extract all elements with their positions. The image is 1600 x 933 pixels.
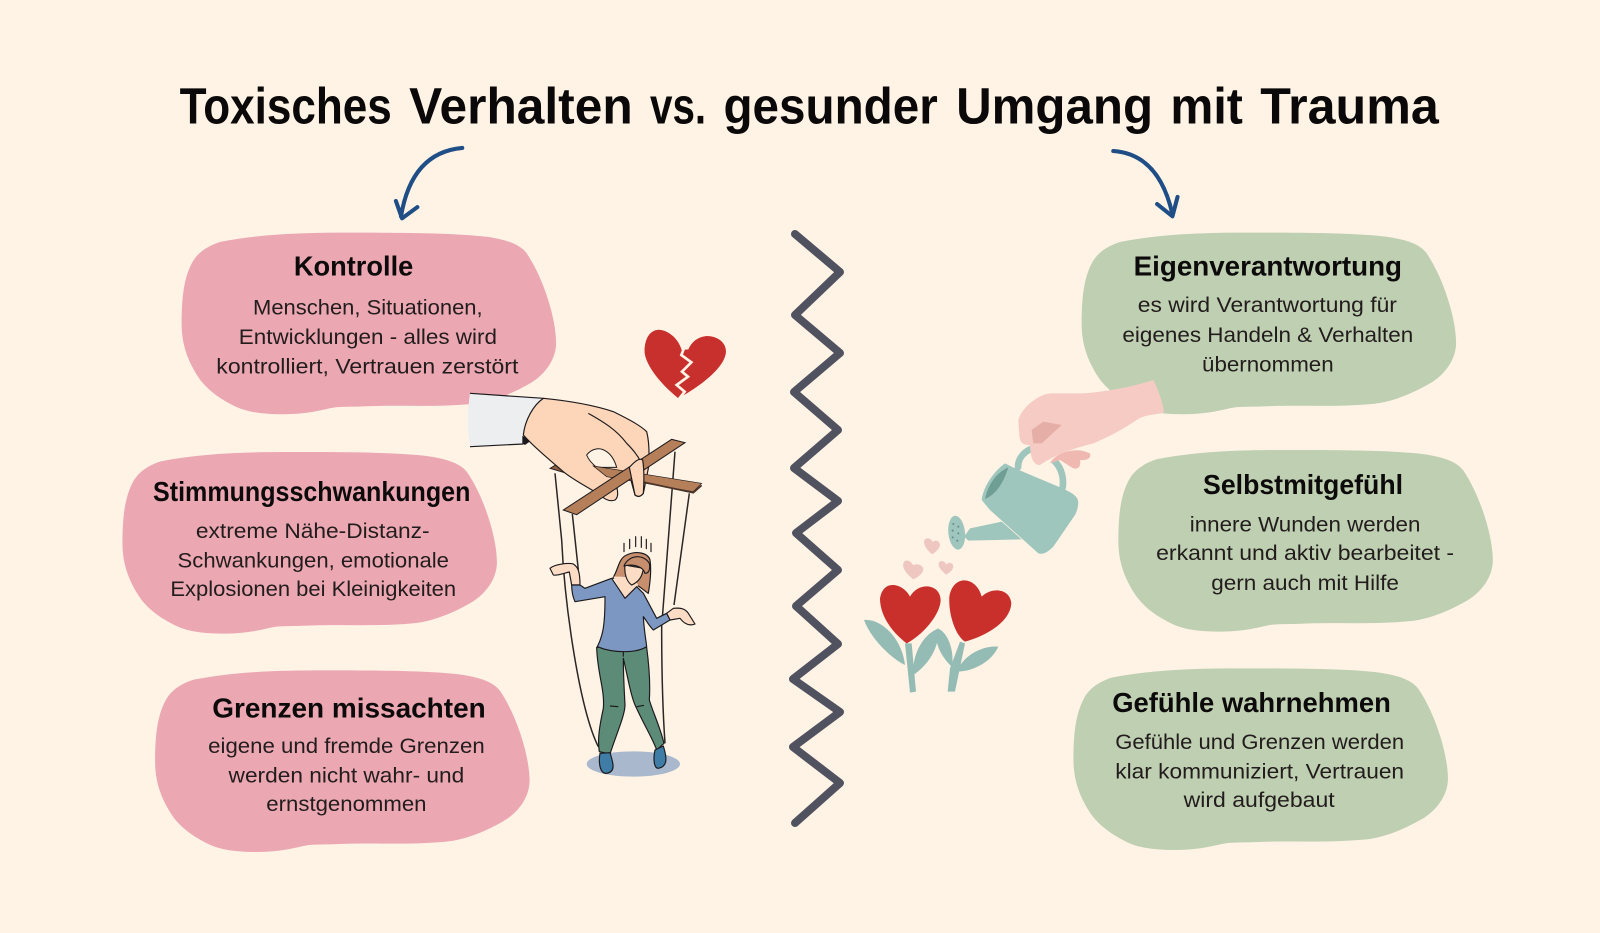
big hearts [880,580,1011,643]
panel: Gefühle wahrnehmen: Gefühle und Grenzen werden [1115,730,1404,754]
panel: Grenzen missachten: Grenzen missachten [212,692,486,723]
hand holding the crossbar [468,393,702,515]
woman puppet [550,553,695,773]
panel: Stimmungsschwankungen [122,452,497,634]
panel: Gefühle wahrnehmen [1073,668,1448,850]
panel: Eigenverantwortung: übernommen [1202,352,1334,376]
left hand [550,564,580,585]
panel: Eigenverantwortung [1082,233,1456,414]
spout [964,522,1022,541]
panel: Kontrolle [182,233,556,414]
panel: Eigenverantwortung: eigenes Handeln & Verhalten [1122,323,1413,347]
panel: Selbstmitgefühl: erkannt und aktiv bearbeitet - [1156,541,1454,565]
sweater [572,578,670,652]
panel: Kontrolle: Kontrolle [294,251,413,282]
title: Toxisches [180,77,392,134]
panel: Grenzen missachten: werden nicht wahr- und [228,764,464,788]
shoes [599,753,613,773]
panel: Gefühle wahrnehmen: Gefühle wahrnehmen [1112,687,1391,718]
panel: Eigenverantwortung: es wird Verantwortung für [1138,293,1397,317]
cuff shadow [522,436,533,445]
hand crease [588,413,643,468]
panel: Kontrolle: Menschen, Situationen, [253,295,483,319]
can body [982,463,1078,554]
crossbar right piece [593,466,702,493]
finger [629,459,644,496]
fringe [624,557,650,573]
can handle [1018,447,1063,487]
panel: Stimmungsschwankungen: Schwankungen, emotionale [178,548,449,572]
title: Umgang [956,77,1153,134]
panel: Selbstmitgefühl: gern auch mit Hilfe [1211,571,1399,595]
panel: Grenzen missachten: eigene und fremde Grenzen [208,734,485,758]
panel: Grenzen missachten [155,670,530,852]
gap between thumb and fingers [587,449,617,467]
hand [1018,380,1164,465]
panel: Gefühle wahrnehmen: wird aufgebaut [1183,788,1335,812]
arrow: left column [396,148,462,218]
panel: Selbstmitgefühl [1118,450,1493,632]
panel: Selbstmitgefühl: Selbstmitgefühl [1203,469,1403,500]
icon: broken heart [645,330,726,399]
finger gap [1032,422,1062,443]
cuff outline [470,393,543,447]
illustration: watering can and hearts [864,380,1164,693]
hair [613,553,651,593]
hand [523,398,649,501]
zigzag divider [793,234,840,823]
title [180,77,1439,134]
shadow [587,751,680,777]
panel: Grenzen missachten: ernstgenommen [266,792,427,816]
illustration: puppet master and puppet [468,330,726,777]
face [625,565,643,585]
panel: Eigenverantwortung: Eigenverantwortung [1134,251,1402,282]
arrow: right column [1113,151,1178,216]
puppet strings [555,452,689,747]
title: mit [1170,77,1243,134]
panel: Kontrolle: Entwicklungen - alles wird [239,325,497,349]
right hand [667,608,695,625]
title: Trauma [1260,77,1439,134]
title: vs. [650,77,706,134]
stress lines above head [624,537,651,552]
panel: Stimmungsschwankungen: extreme Nähe-Distanz- [196,519,430,543]
panel: Stimmungsschwankungen: Stimmungsschwankungen [153,476,470,507]
sprinkler head [947,515,967,550]
lower fingers [1050,450,1090,469]
stems and leaves [864,620,998,693]
panel: Stimmungsschwankungen: Explosionen bei Kleinigkeiten [170,577,456,601]
title: gesunder [723,77,938,134]
title: Verhalten [409,77,633,134]
sleeve [468,393,543,447]
crossbar back stub [550,465,600,483]
panel: Kontrolle: kontrolliert, Vertrauen zerstört [216,354,518,378]
panel: Gefühle wahrnehmen: klar kommuniziert, Vertrauen [1115,760,1404,784]
crossbar front [563,439,685,515]
trousers [597,647,664,754]
neck [613,577,638,600]
small hearts [903,538,953,579]
can and hand [947,380,1164,554]
can opening [985,467,1008,499]
panel: Selbstmitgefühl: innere Wunden werden [1190,513,1420,537]
